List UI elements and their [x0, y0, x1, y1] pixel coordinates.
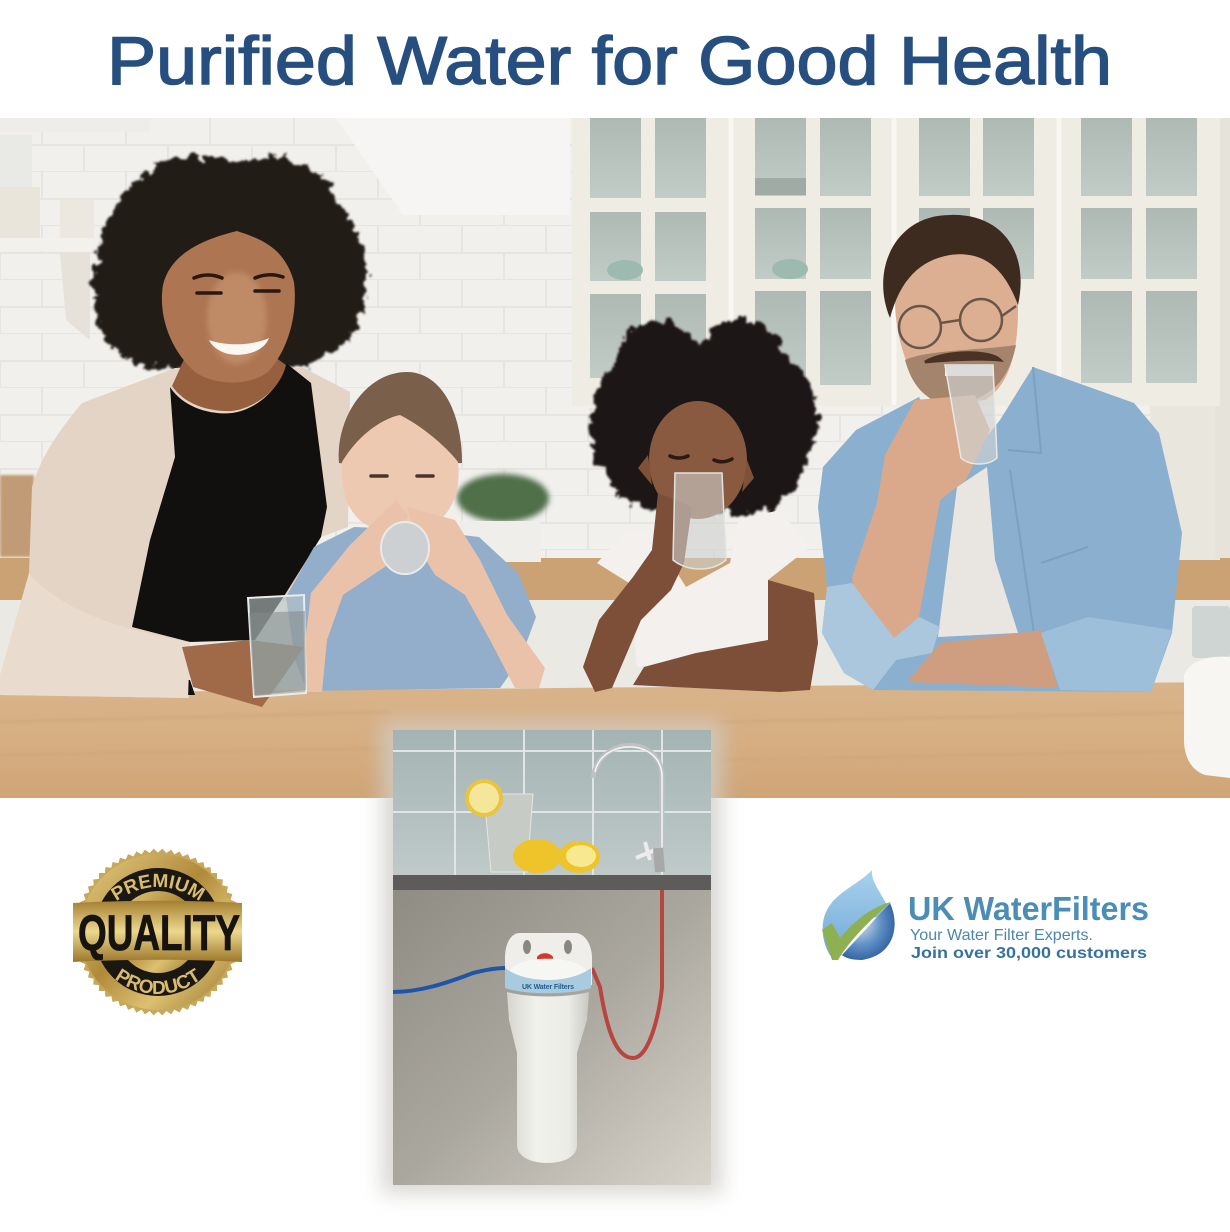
woman smile: [209, 338, 269, 355]
right arm: [633, 580, 818, 692]
afro: [589, 320, 818, 515]
badge premium text: PREMIUM: [110, 874, 206, 901]
badge product text: PRODUCT: [115, 968, 198, 994]
water filter unit: [505, 933, 592, 1163]
man glass: [945, 365, 997, 464]
lemon slice: [465, 779, 503, 817]
man shirt lines: [1008, 367, 1088, 640]
woman eyes and brows: [194, 275, 283, 293]
badge quality text: QUALITY: [78, 905, 240, 961]
woman neck: [172, 355, 286, 411]
man raised arm: [852, 395, 990, 638]
woman hair: [93, 156, 366, 368]
man face: [895, 248, 1018, 405]
logo tagline: Your Water Filter Experts.: [910, 927, 1093, 944]
man lower forearm: [907, 630, 1058, 688]
face: [649, 401, 747, 519]
logo customers line: Join over 30,000 customers: [911, 945, 1147, 962]
filter label band: UK Water Filters: [522, 984, 574, 991]
filter label band: [505, 968, 591, 993]
mounting holes and valve: [523, 940, 572, 960]
badge starburst: [75, 849, 241, 1015]
glass of water: [484, 794, 533, 872]
eyes: [670, 456, 732, 462]
potted plant: [457, 474, 549, 562]
girl eyes: [371, 474, 433, 478]
ears: [638, 455, 754, 492]
girl hair: [339, 372, 462, 465]
filter lid: [510, 959, 586, 985]
lower wall: [393, 890, 711, 1185]
man: [818, 215, 1182, 692]
logo: UK Water Filters: [822, 870, 1149, 962]
wooden table: [0, 682, 1230, 798]
man white tee: [938, 467, 1018, 637]
man glasses: [899, 299, 1016, 348]
badge: premium quality product: [73, 848, 242, 1016]
woman cardigan: [0, 368, 350, 698]
man denim shirt: [818, 367, 1182, 692]
glass: [673, 473, 726, 569]
woman hand and glass: [182, 595, 306, 707]
man hair: [883, 215, 1021, 318]
woman face: [162, 231, 295, 382]
logo check mark: [822, 902, 891, 960]
kitchen background: [0, 118, 1230, 692]
girl right arm: [407, 507, 545, 688]
girl left arm: [304, 500, 408, 692]
title: Purified Water for Good Health: [107, 23, 1112, 99]
girl face: [342, 415, 459, 534]
man left cuff: [822, 583, 940, 690]
woman: [0, 156, 366, 698]
girl with white t-shirt: [583, 320, 818, 692]
half lemon: [558, 841, 600, 873]
glass-front cabinets: [572, 118, 1220, 406]
logo wordmark: UK WaterFilters: [908, 890, 1149, 927]
badge ribbon: [73, 901, 242, 962]
filter housing: [507, 992, 589, 1163]
t-shirt: [597, 510, 810, 667]
girl shirt: [286, 527, 536, 691]
man stubble: [905, 345, 1016, 404]
man teeth: [945, 366, 993, 376]
red outlet hose: [592, 890, 662, 1058]
man moustache: [925, 353, 1000, 362]
woman forehead highlight: [207, 272, 267, 364]
photo: family drinking water in kitchen: [0, 118, 1230, 798]
girl glass: [381, 522, 429, 574]
woman black top: [132, 363, 327, 642]
lemon: [513, 839, 561, 873]
tiled wall: [393, 730, 711, 875]
woman lower black top: [188, 680, 195, 695]
glass jar: [1184, 606, 1230, 778]
filter bracket: [505, 933, 592, 985]
logo water drop: [822, 870, 895, 960]
tap: [593, 745, 662, 873]
left arm: [583, 493, 692, 692]
blue inlet hose: [393, 968, 505, 992]
worktop: [393, 875, 711, 890]
panel: under-sink filter illustration: [382, 722, 722, 1194]
woman sleeve: [0, 573, 190, 698]
man right cuff: [1041, 617, 1172, 692]
girl with blue top: [286, 372, 545, 692]
panel soft edge: [382, 722, 722, 1194]
